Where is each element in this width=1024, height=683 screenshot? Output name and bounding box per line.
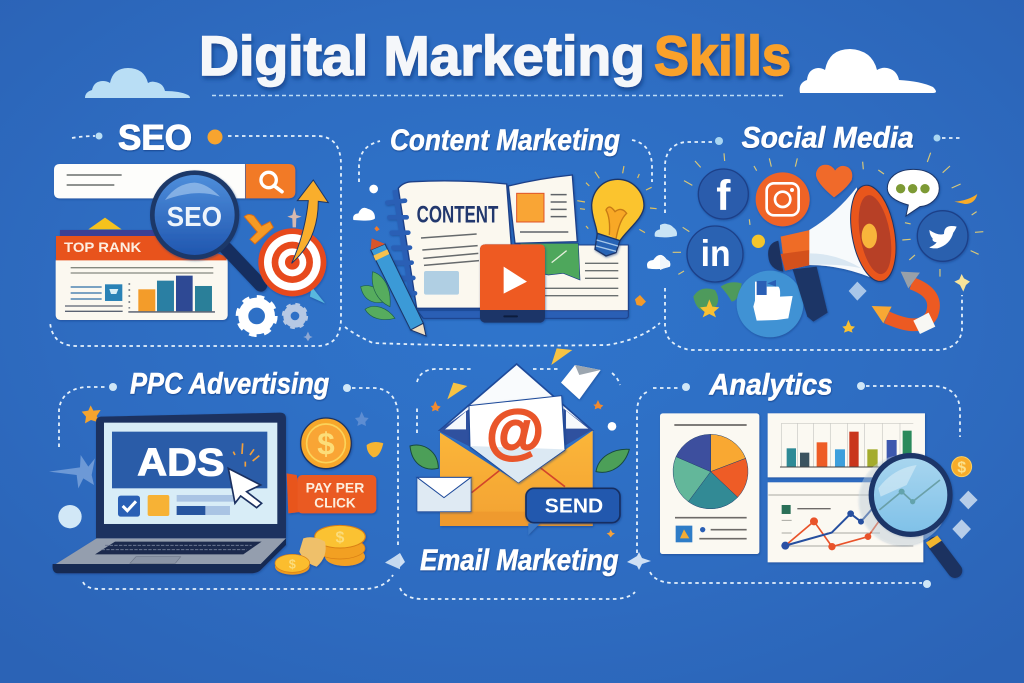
- panel: Analytics: [660, 369, 978, 571]
- badge: pay per click: [287, 473, 376, 513]
- sparkles: [952, 491, 978, 539]
- coin stack: $: [289, 557, 296, 571]
- icon: LinkedIn: in: [701, 232, 731, 274]
- report card: line chart: [768, 482, 923, 562]
- laptop: ADS: [137, 441, 225, 484]
- paper plane: [561, 365, 601, 399]
- title underline: [212, 94, 783, 96]
- icon: heart: [816, 165, 852, 197]
- arrow: curved: [872, 272, 935, 334]
- panel: Analytics: $: [957, 460, 966, 477]
- main title: Digital Marketing: [199, 24, 645, 87]
- letter: @: [486, 398, 544, 465]
- ranking card: TOP RANK: [64, 240, 141, 255]
- icon: gears: [238, 298, 313, 341]
- icon: target: [258, 228, 326, 303]
- coin stack: [275, 525, 365, 575]
- heading: Analytics: Analytics: [708, 369, 833, 402]
- small cloud: [660, 224, 677, 237]
- notebook: left page: CONTENT: [417, 202, 499, 229]
- ranking card: [56, 230, 228, 320]
- icon: Facebook: f: [716, 172, 731, 220]
- icon: dollar coin: [301, 418, 351, 469]
- connector dots and diamonds: [96, 130, 940, 588]
- icon: Twitter: [917, 211, 968, 261]
- leaves: [410, 445, 629, 472]
- leaf: [361, 272, 395, 320]
- cloud: left: [85, 68, 190, 98]
- report card: pie chart: [660, 413, 759, 554]
- heading: Social Media: Social Media: [742, 122, 914, 155]
- pencil: [371, 238, 426, 336]
- badge: pay per click: PAY PER: [306, 480, 364, 496]
- panel: Email Marketing: [410, 348, 629, 577]
- video tablet: [480, 244, 545, 323]
- notebook: right page: [508, 175, 577, 243]
- arrow: growth: [292, 180, 328, 263]
- heading: SEO: SEO: [118, 118, 192, 157]
- icon: speech bubble: [887, 169, 939, 216]
- green note: [520, 243, 580, 280]
- icon: compass star: [287, 207, 302, 227]
- cursor: [228, 468, 262, 508]
- icon: yellow dot: [752, 235, 765, 248]
- panel: PPC Advertising: [49, 367, 400, 575]
- icon: thumbs up: [737, 271, 803, 337]
- panel borders: dashed connectors: [50, 136, 963, 599]
- badge: pay per click: CLICK: [314, 494, 356, 510]
- envelope body: [440, 431, 593, 526]
- icon: Instagram: [756, 172, 810, 226]
- yellow triangles and stars: [431, 348, 616, 537]
- decorations: [49, 405, 400, 569]
- magnifying glass: SEO: [167, 201, 222, 232]
- icon: megaphone: [768, 182, 903, 322]
- envelope back and flap: [440, 364, 592, 430]
- icon: Facebook: [698, 169, 748, 220]
- magnifying glass: [152, 173, 261, 285]
- ranking triangle: [88, 218, 122, 229]
- light bulb: [592, 179, 644, 256]
- icon: orange pin: [244, 214, 273, 244]
- heading: Content Marketing: Content Marketing: [390, 124, 620, 157]
- notebook: left page: [387, 181, 516, 308]
- panel: SEO: [54, 118, 328, 341]
- pie chart: [673, 434, 748, 509]
- icon: LinkedIn: [687, 226, 743, 282]
- bottom sheet: [417, 245, 628, 318]
- laptop: [53, 413, 286, 573]
- send button: SEND: [545, 494, 603, 517]
- stars and sparkles: [842, 194, 977, 333]
- heading: PPC Advertising: PPC Advertising: [130, 367, 329, 400]
- small stars: [635, 295, 646, 306]
- letter: [469, 396, 565, 483]
- panel: Content Marketing: [353, 124, 677, 336]
- panel: Social Media: [660, 122, 983, 337]
- magnifying glass: [858, 455, 955, 571]
- main title: Skills: [654, 24, 791, 87]
- click sparks: [233, 443, 259, 467]
- coin stack: $: [336, 530, 345, 547]
- send button: [526, 488, 620, 535]
- heading: Email Marketing: Email Marketing: [420, 544, 619, 577]
- bulb rays: [577, 166, 657, 233]
- search bar: [54, 164, 295, 198]
- cloud: right: [800, 49, 936, 93]
- rays: [673, 153, 983, 277]
- small clouds: [353, 185, 677, 269]
- report card: bar chart: [768, 413, 925, 477]
- icon: dollar coin: $: [317, 427, 335, 462]
- small envelope: [417, 477, 471, 512]
- green leaves with star: [693, 288, 718, 312]
- icon: coin: [952, 457, 972, 477]
